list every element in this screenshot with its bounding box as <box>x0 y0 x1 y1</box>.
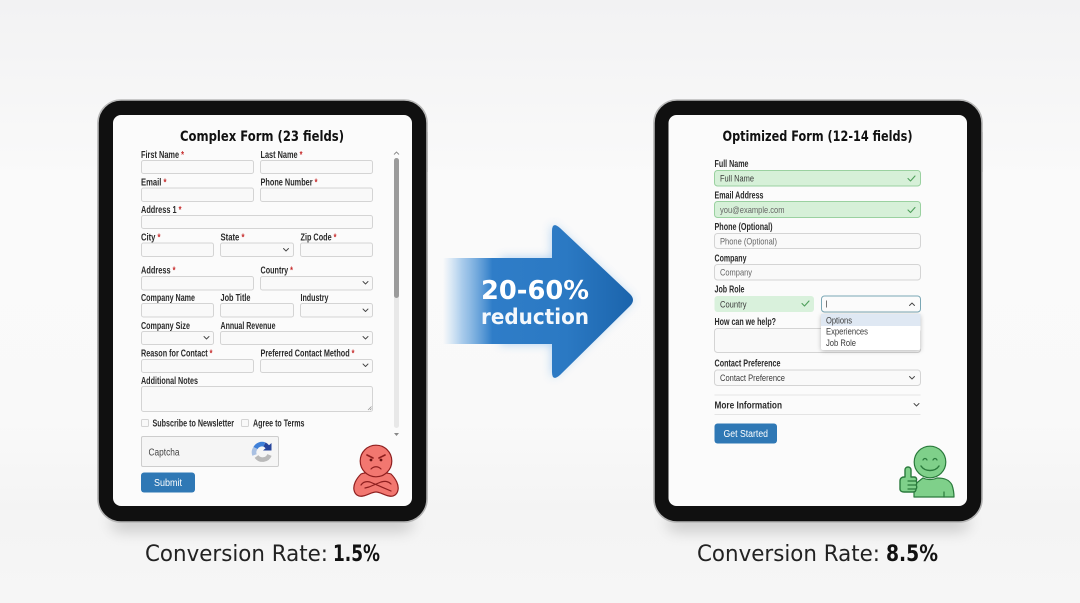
form fields: How can we help? <box>714 317 776 328</box>
submit button: Submit <box>154 478 182 489</box>
tablet bezel <box>98 100 427 522</box>
form fields <box>714 159 920 386</box>
icon: recaptcha <box>254 443 272 460</box>
form fields: Contact Preference <box>714 358 781 370</box>
captcha <box>142 436 278 466</box>
form fields: Address 1 * <box>141 205 182 216</box>
form fields: Phone (Optional) <box>714 222 772 233</box>
form fields: Full Name <box>720 174 754 184</box>
form fields: Phone (Optional) <box>720 236 777 248</box>
form fields: Company <box>714 254 747 264</box>
form title: Optimized Form (12-14 fields) <box>722 129 912 145</box>
form fields: Annual Revenue <box>220 321 276 332</box>
form fields: Address * <box>141 266 176 276</box>
form fields: Country <box>720 300 747 310</box>
checkboxes: Agree to Terms <box>253 418 305 430</box>
form fields: Job Title <box>220 293 251 304</box>
icon: angry person <box>354 445 398 496</box>
form fields: Full Name <box>714 159 749 170</box>
form fields: Last Name * <box>260 150 303 161</box>
form fields: Company Name <box>141 293 195 304</box>
form fields: Preferred Contact Method * <box>260 348 355 360</box>
tablet shadow <box>112 514 412 530</box>
checkboxes: Subscribe to Newsletter <box>152 418 234 430</box>
more information row <box>714 395 920 414</box>
form fields: State * <box>220 232 245 244</box>
dropdown menu: Experiences <box>826 326 868 338</box>
get started button <box>714 424 777 444</box>
form fields: Additional Notes <box>141 376 198 387</box>
form fields: First Name * <box>141 150 184 161</box>
right conversion rate: 8.5% <box>886 542 938 567</box>
form title: Complex Form (23 fields) <box>180 129 344 145</box>
form fields: Email Address <box>714 190 764 202</box>
submit button <box>141 472 195 492</box>
arrow: 20-60% reduction: reduction <box>481 305 589 329</box>
tablet bezel <box>654 100 982 522</box>
scrollbar <box>394 152 399 436</box>
more information row: More Information <box>714 400 782 412</box>
icon: happy person with thumbs up <box>900 446 954 497</box>
form fields: Job Role <box>714 284 745 296</box>
left conversion rate: Conversion Rate: <box>145 542 328 567</box>
tablet screen <box>113 115 412 506</box>
dropdown menu <box>821 314 920 351</box>
dropdown menu: Job Role <box>826 338 856 349</box>
tablet side buttons <box>982 132 983 172</box>
checkboxes <box>142 418 305 430</box>
form fields: Reason for Contact * <box>141 348 213 360</box>
get started button: Get Started <box>724 429 768 440</box>
form fields: City * <box>141 232 161 244</box>
arrow shape <box>443 225 633 378</box>
captcha: Captcha <box>148 448 180 458</box>
right conversion rate: Conversion Rate: <box>697 542 880 567</box>
tablet side buttons <box>427 132 428 172</box>
form fields: Email * <box>141 178 167 188</box>
tablet shadow <box>668 514 968 530</box>
form fields: Country * <box>260 266 293 276</box>
form fields: Company <box>720 268 752 278</box>
left tablet: complex form <box>98 100 428 530</box>
arrow text: 20-60% <box>481 276 589 306</box>
right tablet: optimized form <box>654 100 983 530</box>
form fields: Contact Preference <box>720 373 785 384</box>
arrow: 20-60% reduction <box>443 224 633 378</box>
form fields: you@example.com <box>720 205 785 216</box>
form fields: Zip Code * <box>300 232 337 244</box>
form fields: Company Size <box>141 321 190 332</box>
arrow glow <box>500 224 633 378</box>
form fields <box>141 150 372 412</box>
dropdown menu: Options <box>826 316 852 326</box>
form fields: Phone Number * <box>260 178 318 188</box>
form fields: Industry <box>300 293 329 304</box>
left conversion rate: 1.5% <box>333 542 380 567</box>
tablet screen <box>668 115 967 506</box>
